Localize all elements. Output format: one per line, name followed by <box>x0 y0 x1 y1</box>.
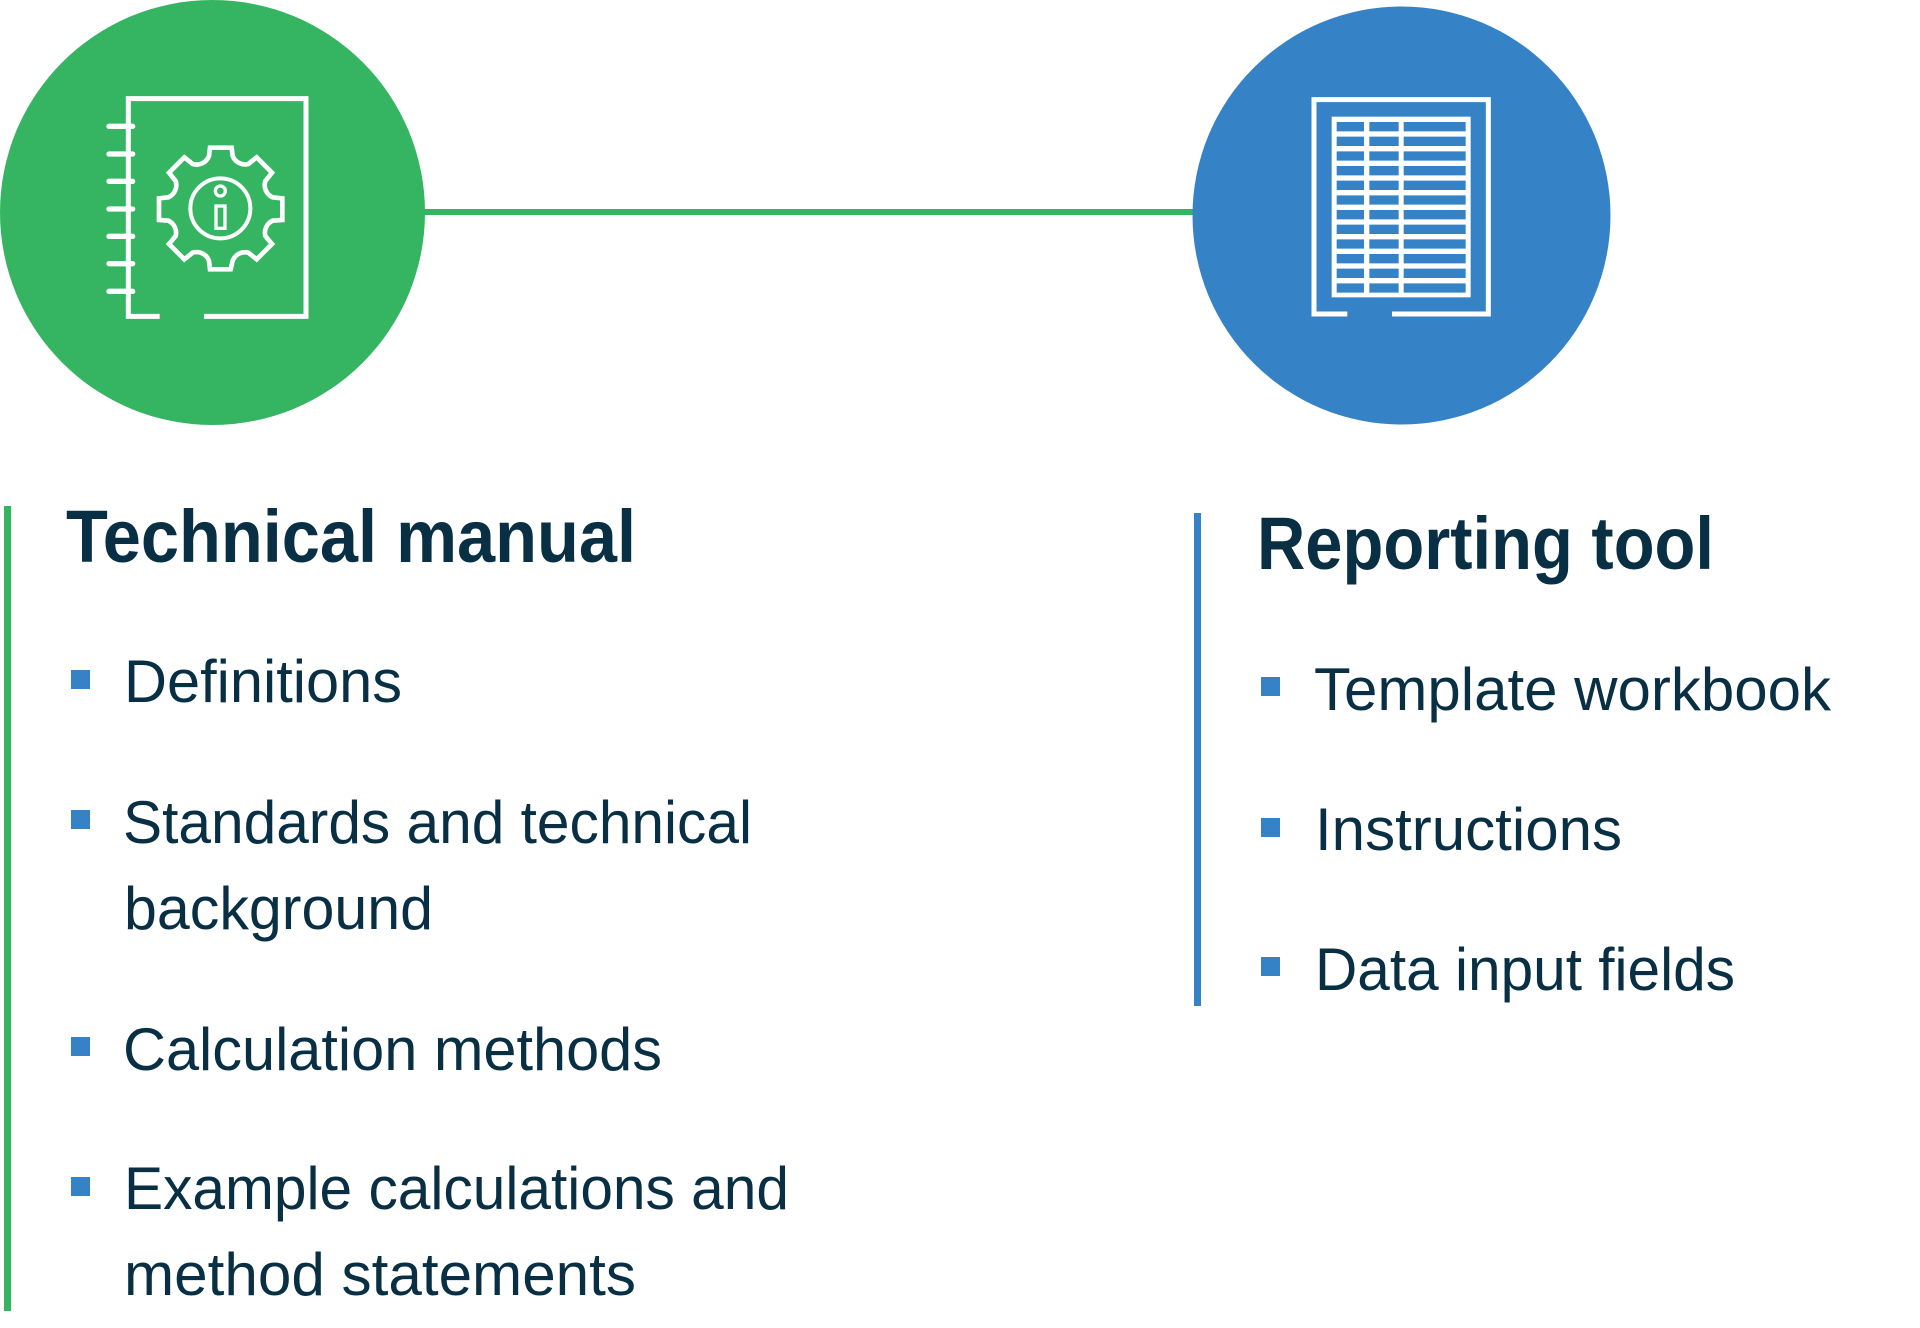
icon: document with table <box>1314 100 1488 314</box>
bullet: example calculations and method statements: method statements <box>124 1241 636 1308</box>
panel: technical manual icon <box>0 0 425 425</box>
bullet: calculation methods: Calculation methods <box>123 1016 662 1083</box>
bullet: example calculations and method statements <box>71 1155 789 1308</box>
bullet: template workbook: Template workbook <box>1314 656 1832 723</box>
bullet: definitions: Definitions <box>124 648 402 715</box>
bullet: data input fields: Data input fields <box>1315 936 1735 1003</box>
bullet: example calculations and method statements: Example calculations and <box>124 1155 789 1222</box>
blue circle <box>1192 6 1610 424</box>
panel: technical manual text <box>4 495 789 1311</box>
green circle <box>0 0 425 425</box>
blue vertical bar <box>1194 513 1201 1006</box>
heading: technical manual: Technical manual <box>66 495 636 578</box>
bullet: standards and technical background <box>71 789 752 942</box>
icon: notebook with gear <box>109 99 306 316</box>
connector line <box>420 209 1200 215</box>
panel: reporting tool text <box>1194 502 1832 1006</box>
bullet: standards and technical background: background <box>124 875 433 942</box>
bullet: instructions: Instructions <box>1315 796 1622 863</box>
panel: reporting tool icon <box>1192 6 1610 424</box>
green vertical bar <box>4 506 11 1311</box>
heading: reporting tool: Reporting tool <box>1257 502 1714 585</box>
bullet: standards and technical background: Standards and technical <box>123 789 752 856</box>
